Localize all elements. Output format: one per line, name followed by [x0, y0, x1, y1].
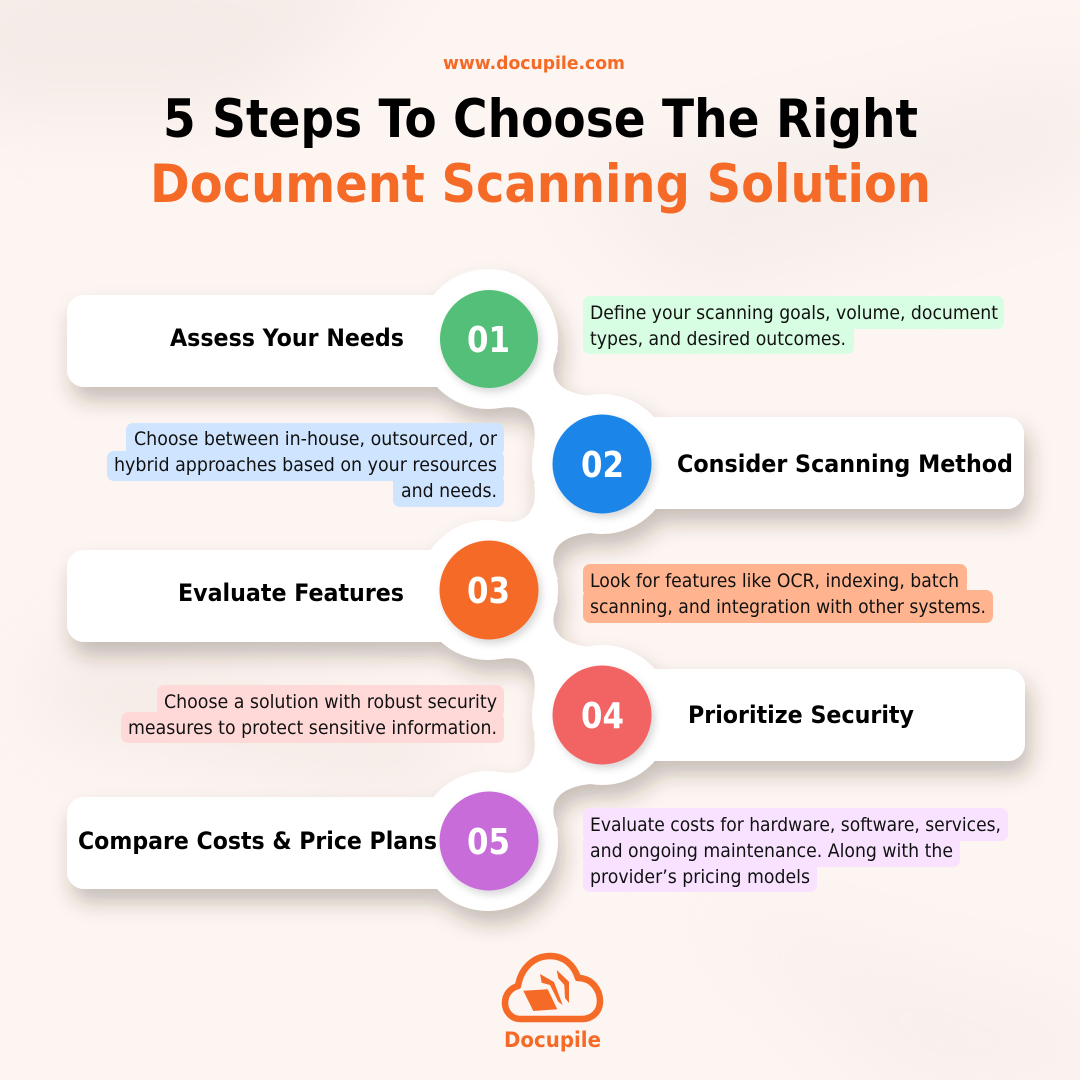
step 05 description: provider’s pricing models — [590, 867, 810, 888]
step 01 title: Assess Your Needs — [170, 323, 404, 352]
step 05 description: and ongoing maintenance. Along with the — [590, 841, 953, 862]
step 03 description: scanning, and integration with other systems. — [590, 597, 986, 618]
step 05 title: Compare Costs & Price Plans — [78, 826, 437, 855]
step 05 badge — [440, 792, 538, 890]
icon: cloud with pages — [505, 956, 600, 1019]
step 03 description — [583, 564, 993, 623]
step 04 description — [121, 685, 504, 743]
step 04 badge: 04 — [581, 696, 624, 737]
step 01 description: types, and desired outcomes. — [590, 329, 846, 350]
website url: www.docupile.com — [443, 54, 625, 74]
step 05 description — [583, 808, 1008, 892]
step 02 badge — [552, 414, 652, 514]
step 02 — [107, 414, 1013, 514]
step 05 — [78, 792, 1008, 892]
step 02 description: and needs. — [401, 481, 497, 502]
step 02 badge: 02 — [581, 445, 624, 486]
step 01 description: Define your scanning goals, volume, document — [590, 303, 998, 324]
step 01 description — [583, 296, 1004, 354]
step 05 badge: 05 — [467, 822, 510, 863]
step 01 badge — [440, 290, 538, 388]
step 04 badge — [552, 666, 652, 764]
step 01 — [170, 290, 1004, 388]
step 03 — [178, 540, 993, 640]
title — [150, 89, 931, 215]
step 02 description: Choose between in-house, outsourced, or — [134, 429, 497, 450]
step 03 badge — [440, 540, 538, 640]
title: Document Scanning Solution — [150, 154, 931, 215]
white step connector with cards — [67, 269, 1025, 911]
title: 5 Steps To Choose The Right — [163, 89, 918, 150]
step 02 description: hybrid approaches based on your resources — [114, 455, 497, 476]
logo — [504, 956, 601, 1053]
logo wordmark: Docupile — [504, 1028, 601, 1053]
step 02 description — [107, 423, 504, 507]
step 01 badge: 01 — [467, 320, 510, 361]
step 03 description: Look for features like OCR, indexing, batch — [590, 571, 959, 592]
step 02 title: Consider Scanning Method — [677, 449, 1013, 478]
step 03 badge: 03 — [467, 571, 510, 612]
step 03 title: Evaluate Features — [178, 578, 404, 607]
step 05 description: Evaluate costs for hardware, software, services, — [590, 815, 1001, 836]
step 04 — [121, 666, 914, 764]
step 04 description: measures to protect sensitive information. — [128, 718, 497, 739]
step 04 description: Choose a solution with robust security — [164, 692, 497, 713]
step 04 title: Prioritize Security — [688, 700, 914, 729]
